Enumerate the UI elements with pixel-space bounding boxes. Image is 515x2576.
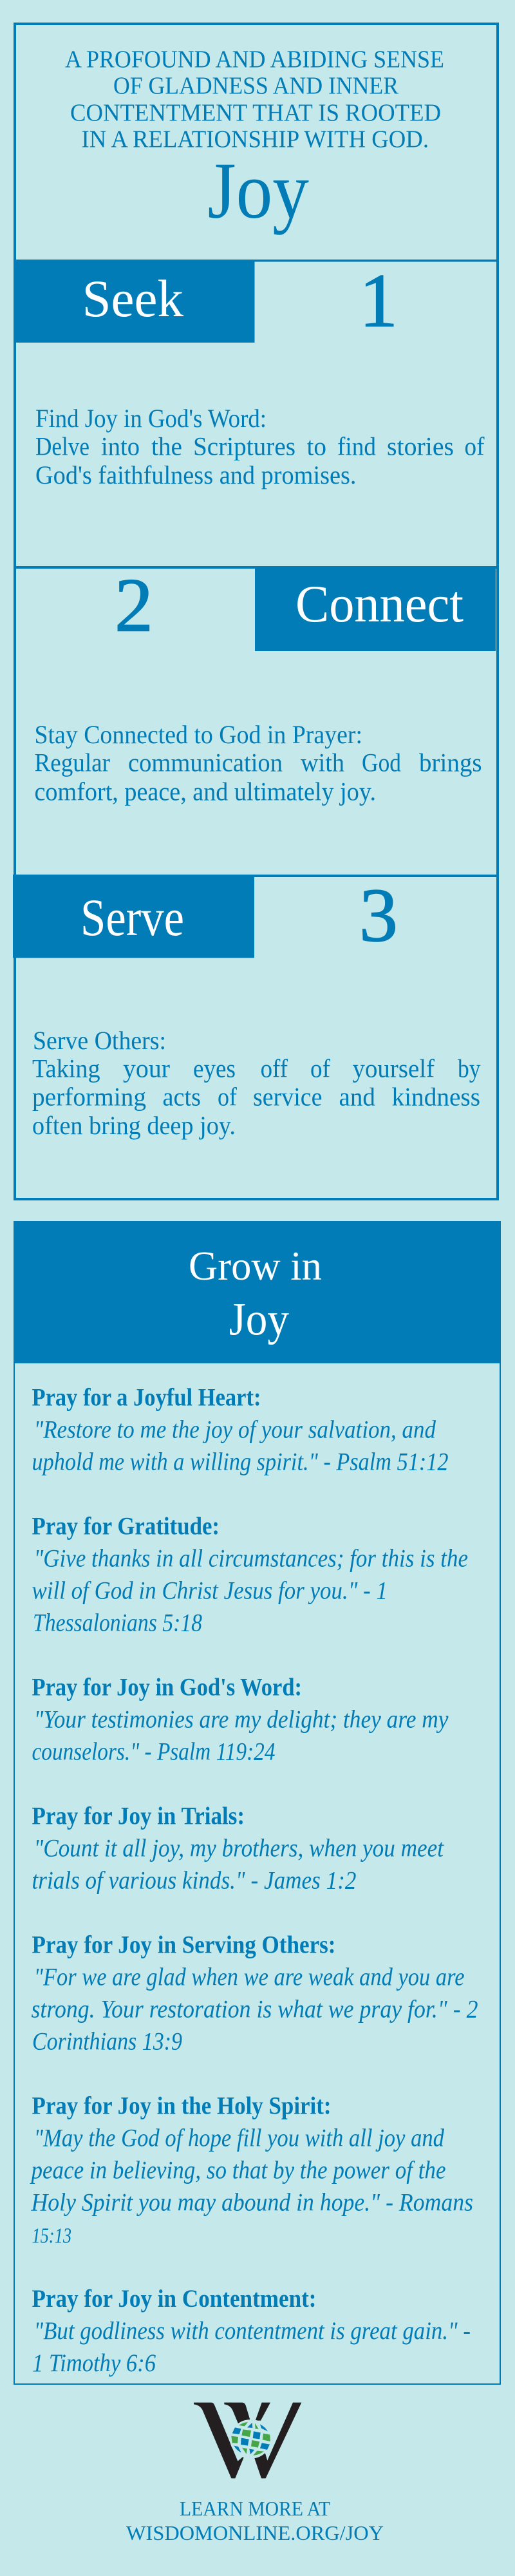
prayer 2: "Give thanks in all circumstances; for this is the [33, 1544, 468, 1573]
step 3 number: 3 [359, 873, 398, 958]
step 2 number: 2 [115, 563, 153, 648]
step 2 text: God [362, 748, 401, 777]
prayer 6: 15:13 [32, 2224, 71, 2248]
footer link text [126, 2497, 384, 2544]
definition text [65, 46, 444, 153]
prayer 6: "May the God of hope fill you with all joy and [33, 2124, 444, 2152]
prayer 3: counselors." - Psalm 119:24 [32, 1738, 276, 1766]
step 2 label: Connect [255, 567, 496, 651]
prayer 3: Pray for Joy in God's Word: [32, 1673, 302, 1701]
definition text: CONTENTMENT THAT IS ROOTED [70, 99, 441, 126]
step 3 text: yourself [353, 1054, 435, 1083]
definition text: A PROFOUND AND ABIDING SENSE [65, 46, 444, 73]
step 3 text: often bring deep joy. [32, 1111, 236, 1140]
step 3 text: kindness [391, 1083, 480, 1112]
icon: wisdom online logo [194, 2403, 301, 2478]
footer link text: LEARN MORE AT [180, 2497, 330, 2520]
prayer 2: Pray for Gratitude: [32, 1512, 220, 1540]
prayer 4 [32, 1802, 444, 1895]
step 1 label: Seek: Seek [82, 269, 183, 328]
step 2 text: communication [128, 748, 283, 777]
step 2 text: Stay Connected to God in Prayer: [35, 720, 362, 749]
prayer 4: trials of various kinds." - James 1:2 [32, 1866, 357, 1895]
step 3 text: performing [32, 1083, 146, 1112]
step 2 text: with [301, 748, 344, 777]
definition text: IN A RELATIONSHIP WITH GOD. [81, 126, 429, 153]
prayer 5 [31, 1931, 478, 2056]
prayer 6: Pray for Joy in the Holy Spirit: [32, 2092, 331, 2120]
step 3 text: off [261, 1054, 288, 1083]
prayer 2 [32, 1512, 468, 1637]
prayer 7: 1 Timothy 6:6 [32, 2349, 156, 2377]
step 3 text: Serve Others: [33, 1026, 166, 1055]
step 1 text: Delve [35, 431, 89, 460]
prayer 1 [32, 1383, 448, 1476]
step 1 text: stories [387, 431, 454, 460]
panel header: Grow in Joy: Joy [229, 1293, 289, 1345]
prayer 6 [30, 2092, 473, 2248]
prayer 1: uphold me with a willing spirit." - Psalm 51:12 [32, 1448, 448, 1476]
prayer 4: "Count it all joy, my brothers, when you meet [33, 1834, 444, 1862]
panel: grow in joy prayers [14, 1221, 501, 2384]
prayer 3: "Your testimonies are my delight; they are my [33, 1705, 449, 1734]
step 2 text: Regular [35, 748, 110, 777]
step 1 number: 1 [359, 258, 398, 343]
prayer 7: "But godliness with contentment is great gain." - [33, 2317, 471, 2345]
prayer 1: Pray for a Joyful Heart: [32, 1383, 261, 1412]
step 3 text: Taking [32, 1054, 100, 1083]
step 3 text [32, 1026, 480, 1140]
step 2 label: Connect: Connect [295, 574, 464, 633]
prayer 5: Corinthians 13:9 [32, 2027, 182, 2056]
step 1 text [35, 404, 485, 489]
prayer 2: Thessalonians 5:18 [33, 1609, 202, 1637]
divider 3 [14, 875, 499, 877]
prayer 6: Holy Spirit you may abound in hope." - Romans [31, 2188, 473, 2217]
step 2 text [35, 720, 482, 806]
step 3 text: your [123, 1054, 170, 1083]
panel header: Grow in Joy: Grow in [189, 1243, 322, 1289]
title: Joy [207, 147, 309, 236]
prayer 7 [32, 2285, 471, 2377]
step 3 text: of [218, 1083, 238, 1112]
divider 2 [14, 566, 499, 569]
step 2 text: brings [419, 748, 482, 777]
step 3 text: and [339, 1083, 375, 1112]
step 1 text: into [101, 431, 140, 460]
step 2 text: comfort, peace, and ultimately joy. [35, 777, 376, 806]
step 3 label: Serve [13, 875, 254, 958]
prayer 5: "For we are glad when we are weak and you are [33, 1963, 465, 1991]
prayer 6: peace in believing, so that by the power of the [30, 2156, 446, 2184]
prayer 4: Pray for Joy in Trials: [32, 1802, 245, 1830]
step 1 text: Scriptures [193, 431, 295, 460]
prayer 2: will of God in Christ Jesus for you." - 1 [32, 1577, 388, 1605]
divider 1 [14, 260, 499, 261]
prayer 7: Pray for Joy in Contentment: [32, 2285, 317, 2313]
step 1 text: of [465, 431, 485, 460]
step 3 text: of [310, 1054, 331, 1083]
step 1 text: to [306, 431, 326, 460]
prayer 1: "Restore to me the joy of your salvation, and [33, 1416, 436, 1444]
step 3 label: Serve: Serve [80, 888, 184, 947]
step 1 text: find [337, 431, 376, 460]
prayer 5: strong. Your restoration is what we pray for." - 2 [31, 1995, 478, 2023]
panel: definition and three steps frame [13, 24, 499, 1199]
step 1 label: Seek [14, 260, 255, 343]
step 1 text: the [151, 431, 182, 460]
step 3 text: eyes [193, 1054, 236, 1083]
prayer 3 [32, 1673, 449, 1766]
step 3 text: acts [162, 1083, 201, 1112]
panel header: Grow in Joy [14, 1221, 501, 1363]
step 1 text: Find Joy in God's Word: [35, 404, 267, 433]
step 3 text: service [253, 1083, 322, 1112]
definition text: OF GLADNESS AND INNER [113, 73, 399, 100]
step 1 text: God's faithfulness and promises. [35, 460, 357, 489]
prayer 5: Pray for Joy in Serving Others: [32, 1931, 336, 1959]
step 3 text: by [458, 1054, 480, 1083]
footer link text: WISDOMONLINE.ORG/JOY [126, 2521, 384, 2544]
